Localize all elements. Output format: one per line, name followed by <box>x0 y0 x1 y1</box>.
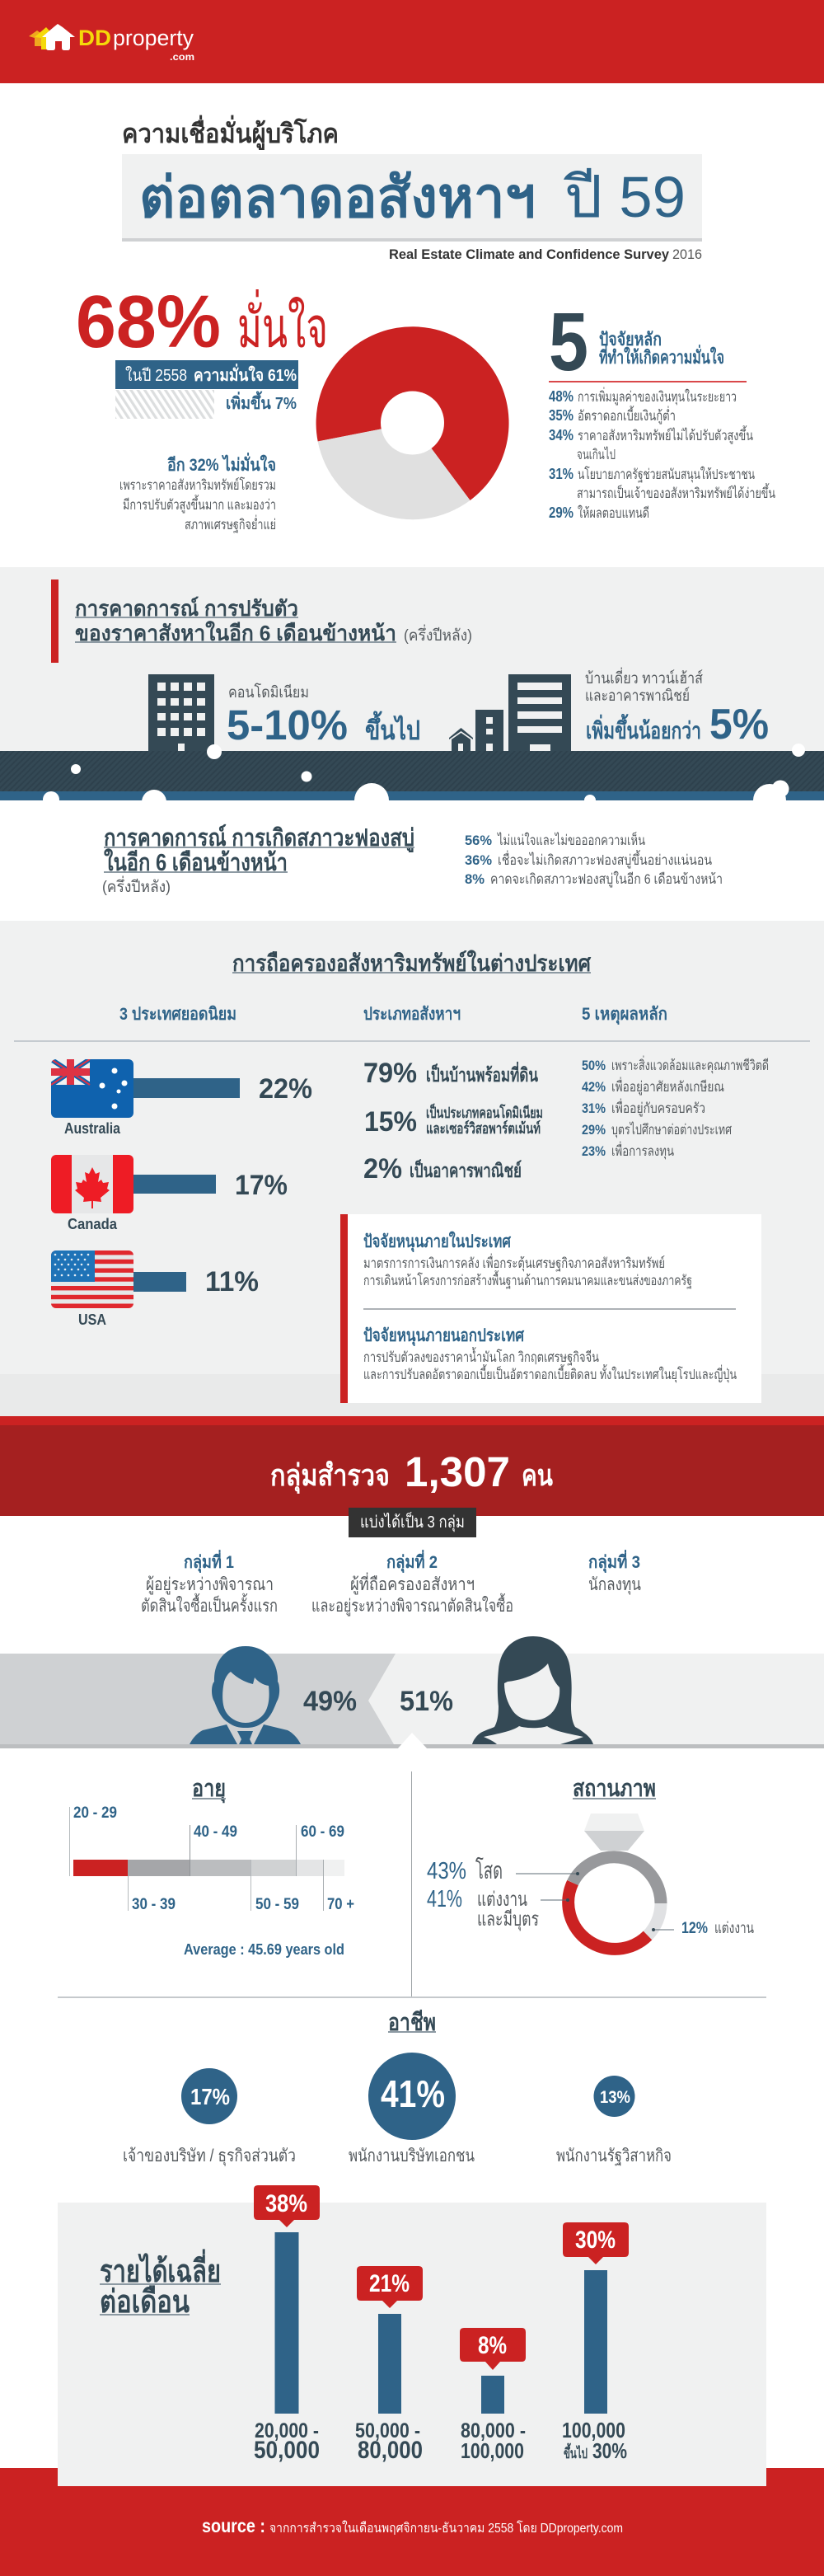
logo: DDproperty: .com <box>170 51 194 63</box>
bar chart: income 80,000-100,000: 8% <box>478 2332 507 2359</box>
headline 68%: มั่นใจ <box>237 289 328 359</box>
panel dividers <box>58 1771 766 1998</box>
bubble: 17% <box>123 2068 296 2166</box>
text: three survey groups <box>141 1549 641 1616</box>
red accent bar <box>51 579 59 663</box>
list: confidence factors: 35% <box>549 407 574 424</box>
callout: 2558 comparison: ในปี 2558 <box>125 366 187 385</box>
panel: occupation <box>123 2010 672 2166</box>
panel: overseas property ownership <box>0 921 824 1416</box>
column headers: 5 เหตุผลหลัก <box>582 1005 667 1025</box>
logo: DDproperty <box>29 24 194 63</box>
group 2: และอยู่ระหว่างพิจารณาตัดสินใจซื้อ <box>311 1593 513 1616</box>
logo: DDproperty: DD <box>78 26 111 50</box>
list: confidence factors: อัตราดอกเบี้ยเงินกู้ต่ำ <box>578 406 676 425</box>
bar chart: income 80,000-100,000: 80,000 - <box>461 2419 526 2442</box>
list: bubble expectations: 36% <box>465 852 492 868</box>
panel: marital status <box>427 1776 754 1949</box>
logo: DDproperty: property <box>113 26 194 50</box>
label: married with children: แต่งงาน <box>477 1889 527 1911</box>
bar chart: income 20,000-50,000: 38% <box>265 2190 307 2217</box>
heading: 5 main factors: 5 <box>549 296 588 388</box>
text: condominium forecast: คอนโดมิเนียม <box>228 683 309 701</box>
headline 68%: 68% <box>76 281 221 364</box>
list: five reasons: 42% <box>582 1079 606 1095</box>
dark ground band <box>0 751 824 800</box>
text: detached house forecast: บ้านเดี่ยว ทาวน์เฮ้าส์ <box>585 667 703 687</box>
headline 68% <box>76 281 328 364</box>
Canada: 17% <box>235 1170 288 1201</box>
icon: Canadian flag <box>51 1155 133 1213</box>
bubble: 17%: เจ้าของบริษัท / ธุรกิจส่วนตัว <box>123 2147 296 2166</box>
text: detached house forecast: เพิ่มขึ้นน้อยกว่า <box>586 713 701 744</box>
text: detached house forecast: และอาคารพาณิชย์ <box>585 687 690 705</box>
bar chart: income 50,000-80,000: 80,000 <box>358 2437 423 2464</box>
group 1 <box>141 1549 278 1616</box>
bubble: 13% <box>556 2076 672 2165</box>
bubble forecast heading <box>102 823 414 896</box>
heading: 5 main factors <box>549 296 747 388</box>
text: condominium forecast <box>227 683 420 748</box>
text: 32% not confident: สภาพเศรษฐกิจย่ำแย่ <box>185 514 276 533</box>
list: bubble expectations: 8% <box>465 871 485 887</box>
list: five reasons: 23% <box>582 1143 606 1159</box>
callout: 2558 comparison <box>115 360 298 419</box>
text: 32% not confident: อีก 32% ไม่มั่นใจ <box>167 452 276 475</box>
percentages: gender: 49% <box>303 1686 357 1717</box>
list: confidence factors: นโยบายภาครัฐช่วยสนับสนุนให้ประชาชน <box>578 466 755 483</box>
heading: monthly income: ต่อเดือน <box>100 2285 190 2320</box>
list: bubble expectations <box>465 831 723 888</box>
percentages: gender: 51% <box>400 1686 453 1717</box>
list: confidence factors: จนเกินไป <box>577 446 616 462</box>
forecast heading <box>75 596 472 645</box>
bubble: 17%: 17% <box>190 2084 230 2109</box>
icon: condominium building <box>148 674 214 751</box>
Australia <box>51 1059 312 1137</box>
title: upper line: ความเชื่อมั่นผู้บริโภค <box>122 115 339 151</box>
bubble forecast heading: ในอีก 6 เดือนข้างหน้า <box>104 848 288 876</box>
text: condominium forecast: ขึ้นไป <box>365 711 420 745</box>
group 2: กลุ่มที่ 2 <box>386 1549 438 1574</box>
age labels: 70 + <box>327 1896 354 1913</box>
list: confidence factors <box>549 387 775 521</box>
column headers: ประเภทอสังหาฯ <box>363 1005 461 1024</box>
bar chart: income 50,000-80,000 <box>355 2266 423 2464</box>
icon: Australian flag <box>51 1059 133 1118</box>
gender split band <box>0 1636 824 1749</box>
banner: survey sample: กลุ่มสำรวจ <box>270 1458 390 1494</box>
panel: consumer confidence <box>76 281 775 533</box>
survey subtitle: 2016 <box>672 246 702 262</box>
USA: USA <box>78 1311 106 1328</box>
Australia: Australia <box>64 1120 121 1137</box>
donut chart 68 / 32 <box>316 326 509 519</box>
bar chart: income 100,000 and up: 30% <box>575 2226 616 2254</box>
bar chart: income 80,000-100,000 <box>460 2328 526 2463</box>
list: confidence factors: ราคาอสังหาริมทรัพย์ไม่ได้ปรับตัวสูงขึ้น <box>578 425 753 444</box>
survey subtitle: Real Estate Climate and Confidence Survey <box>389 246 670 262</box>
text: condominium forecast: 5-10% <box>227 701 348 748</box>
tag: three groups: แบ่งได้เป็น 3 กลุ่ม <box>360 1511 465 1532</box>
property types: 2% <box>363 1153 402 1185</box>
list: five reasons: เพื่ออยู่กับครอบครัว <box>611 1098 705 1117</box>
age labels: 20 - 29 <box>73 1804 117 1822</box>
callout: 2558 comparison: ความมั่นใจ 61% <box>194 363 297 385</box>
source line: source : <box>202 2515 265 2536</box>
label: married with children: 41% <box>427 1886 462 1912</box>
age labels: 60 - 69 <box>301 1823 344 1841</box>
percentages: gender <box>303 1686 453 1717</box>
bar chart: top countries <box>51 1059 312 1328</box>
panel: monthly income <box>58 2185 766 2486</box>
age segmented bar <box>69 1807 344 1911</box>
callout: supporting factors: การปรับตัวลงของราคาน้ำมันโลก วิกฤตเศรษฐกิจจีน <box>363 1347 599 1366</box>
list: bubble expectations: คาดจะเกิดสภาวะฟองสบู่ในอีก 6 เดือนข้างหน้า <box>490 870 723 888</box>
text: 32% not confident: เพราะราคาอสังหาริมทรัพย์โดยรวม <box>119 476 276 493</box>
bar chart: income 100,000 and up <box>562 2222 629 2463</box>
heading: monthly income: รายได้เฉลี่ย <box>100 2249 221 2289</box>
label: married <box>652 1920 754 1937</box>
title box: ปี 59 <box>564 165 686 229</box>
forecast heading: การคาดการณ์ การปรับตัว <box>75 596 298 621</box>
bar chart: income 80,000-100,000: 100,000 <box>461 2438 524 2463</box>
icon: house and low-rise buildings <box>449 674 571 751</box>
Canada <box>51 1155 288 1232</box>
callout: 2558 comparison: เพิ่มขึ้น 7% <box>226 391 297 413</box>
panel: bubble forecast <box>102 823 723 896</box>
panel: age <box>69 1776 354 1958</box>
list: confidence factors: 31% <box>549 466 574 482</box>
age labels <box>73 1804 354 1913</box>
list: bubble expectations: ไม่แน่ใจและไม่ขอออกความเห็น <box>496 831 645 848</box>
property types: เป็นอาคารพาณิชย์ <box>410 1158 522 1181</box>
bubble: 41% <box>349 2053 475 2165</box>
source line <box>202 2515 623 2536</box>
title box: ต่อตลาดอสังหาฯ <box>139 167 536 229</box>
list: confidence factors: 29% <box>549 504 574 521</box>
label: single <box>427 1856 579 1884</box>
group 3 <box>588 1549 641 1595</box>
callout: supporting factors: มาตรการการเงินการคลัง เพื่อกระตุ้นเศรษฐกิจภาคอสังหาริมทรัพย์ <box>363 1253 665 1272</box>
Canada: Canada <box>68 1216 118 1232</box>
heading: 5 main factors: ที่ทำให้เกิดความมั่นใจ <box>599 344 724 368</box>
bar chart: income 100,000 and up: ขึ้นไป <box>564 2442 588 2461</box>
list: five reasons: 31% <box>582 1100 606 1116</box>
label: married: แต่งงาน <box>714 1920 754 1937</box>
bubble: 41%: 41% <box>381 2072 445 2115</box>
list: five reasons: เพราะสิ่งแวดล้อมและคุณภาพชีวิตดี <box>611 1055 769 1074</box>
age labels: 40 - 49 <box>194 1823 237 1841</box>
list: five reasons <box>582 1055 769 1160</box>
USA <box>51 1250 259 1328</box>
footer banner <box>0 2468 824 2576</box>
text: 32% not confident: มีการปรับตัวสูงขึ้นมาก และมองว่า <box>123 495 276 514</box>
average age: Average : 45.69 years old <box>184 1941 344 1958</box>
column headers <box>14 1005 810 1042</box>
property types <box>363 1058 543 1185</box>
bubble: 13%: 13% <box>600 2088 630 2107</box>
tag: three groups <box>349 1508 476 1537</box>
group 2 <box>311 1549 513 1616</box>
page header banner <box>0 0 824 83</box>
bar chart: income 50,000-80,000: 50,000 - <box>355 2419 420 2442</box>
callout: supporting factors <box>340 1214 761 1403</box>
label: single: โสด <box>475 1856 503 1884</box>
forecast heading: (ครึ่งปีหลัง) <box>404 624 472 645</box>
property types: เป็นบ้านพร้อมที่ดิน <box>426 1061 538 1086</box>
callout: supporting factors: การเดินหน้าโครงการก่อสร้างพื้นฐานด้านการคมนาคมและขนส่งของภาครัฐ <box>363 1270 692 1289</box>
group 1: ตัดสินใจซื้อเป็นครั้งแรก <box>141 1593 278 1616</box>
property types: 79% <box>363 1058 417 1089</box>
property types: และเซอร์วิสอพาร์ตเม้นท์ <box>426 1119 541 1137</box>
label: married: 12% <box>681 1920 708 1937</box>
heading: occupation: อาชีพ <box>388 2010 436 2036</box>
list: confidence factors: 34% <box>549 427 574 443</box>
bar chart: income 20,000-50,000 <box>254 2185 320 2464</box>
group 3: นักลงทุน <box>588 1575 641 1595</box>
title box <box>122 154 702 242</box>
bubble forecast heading: การคาดการณ์ การเกิดสภาวะฟองสบู่ <box>104 823 414 852</box>
text: 32% not confident <box>119 452 276 533</box>
column headers: 3 ประเทศยอดนิยม <box>119 1005 236 1024</box>
bubble: 41%: พนักงานบริษัทเอกชน <box>349 2147 475 2165</box>
bubble: 13%: พนักงานรัฐวิสาหกิจ <box>556 2147 672 2165</box>
icon: diamond ring chart <box>569 1814 661 1949</box>
banner: survey sample: คน <box>522 1458 553 1492</box>
property types: 15% <box>364 1106 417 1138</box>
group 2: ผู้ที่ถือครองอสังหาฯ <box>350 1572 475 1595</box>
forecast heading: ของราคาสังหาในอีก 6 เดือนข้างหน้า <box>75 621 396 645</box>
label: married with children: และมีบุตร <box>477 1908 539 1931</box>
property types: เป็นประเภทคอนโดมิเนียม <box>426 1103 543 1121</box>
group 3: กลุ่มที่ 3 <box>588 1549 640 1574</box>
bar chart: income 100,000 and up: 100,000 <box>562 2418 625 2442</box>
heading: 5 main factors: ปัจจัยหลัก <box>599 329 662 350</box>
icon: US flag <box>51 1250 133 1308</box>
USA: 11% <box>205 1266 259 1297</box>
group 1: กลุ่มที่ 1 <box>184 1549 234 1574</box>
label: married with children <box>427 1886 569 1931</box>
bubbles <box>43 744 805 818</box>
list: bubble expectations: 56% <box>465 833 492 848</box>
bubble forecast heading: (ครึ่งปีหลัง) <box>102 875 171 896</box>
icon: woman <box>472 1636 593 1744</box>
list: confidence factors: การเพิ่มมูลค่าของเงินทุนในระยะยาว <box>578 387 737 406</box>
bar chart: income 20,000-50,000: 50,000 <box>254 2437 320 2464</box>
heading: overseas ownership: การถือครองอสังหาริมทรัพย์ในต่างประเทศ <box>232 950 592 976</box>
bar chart: income 100,000 and up: 30% <box>592 2438 627 2463</box>
callout: supporting factors: ปัจจัยหนุนภายนอกประเทศ <box>363 1326 525 1347</box>
source line: จากการสำรวจในเดือนพฤศจิกายน-ธันวาคม 2558 โดย DDproperty.com <box>269 2520 623 2536</box>
age labels: 30 - 39 <box>132 1896 176 1913</box>
heading: status: สถานภาพ <box>573 1776 656 1802</box>
callout: supporting factors: ปัจจัยหนุนภายในประเทศ <box>363 1231 512 1253</box>
age labels: 50 - 59 <box>255 1896 299 1913</box>
list: five reasons: เพื่ออยู่อาศัยหลังเกษียณ <box>611 1077 724 1096</box>
heading: monthly income <box>100 2249 221 2320</box>
list: five reasons: เพื่อการลงทุน <box>611 1141 674 1160</box>
text: detached house forecast <box>585 667 769 748</box>
heading: age: อายุ <box>192 1776 226 1803</box>
text: detached house forecast: 5% <box>709 701 769 748</box>
group 1: ผู้อยู่ระหว่างพิจารณา <box>146 1575 274 1595</box>
list: five reasons: 29% <box>582 1122 606 1138</box>
list: five reasons: 50% <box>582 1058 606 1073</box>
Australia: 22% <box>259 1073 312 1105</box>
bar chart: income 50,000-80,000: 21% <box>369 2270 410 2297</box>
list: confidence factors: ให้ผลตอบแทนดี <box>578 504 649 521</box>
list: bubble expectations: เชื่อจะไม่เกิดสภาวะฟองสบู่ขึ้นอย่างแน่นอน <box>498 850 712 869</box>
banner: survey sample: 1,307 <box>405 1448 510 1495</box>
label: single: 43% <box>427 1858 466 1884</box>
icon: man <box>190 1646 301 1744</box>
banner: survey sample <box>0 1416 824 1537</box>
bar chart: income 20,000-50,000: 20,000 - <box>255 2419 319 2442</box>
list: confidence factors: 48% <box>549 388 574 405</box>
list: five reasons: บุตรไปศึกษาต่อต่างประเทศ <box>611 1121 732 1138</box>
title block <box>122 115 702 262</box>
panel: price forecast <box>0 567 824 818</box>
